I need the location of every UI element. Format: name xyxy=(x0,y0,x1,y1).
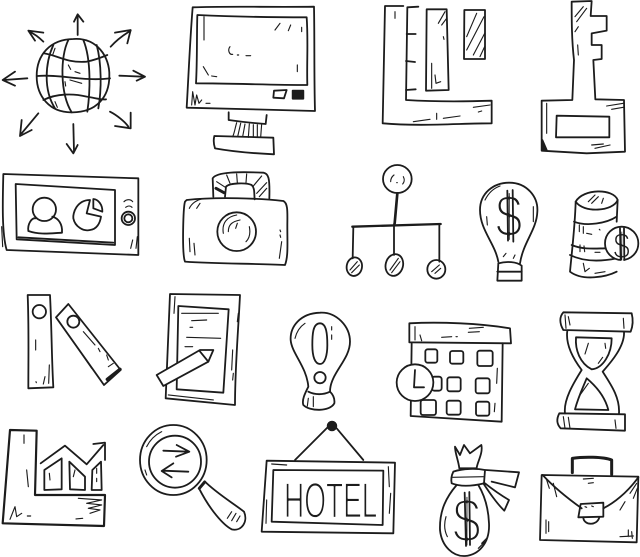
icon: magnifying glass xyxy=(140,425,245,530)
icon: dollar light bulb: $ xyxy=(496,183,522,250)
icon: money bag xyxy=(440,445,519,557)
icon: phone with profile and pie chart xyxy=(2,174,138,255)
icon: coin stack with dollar coin xyxy=(570,191,638,277)
icon: camera xyxy=(183,172,287,265)
icon: calendar with clock xyxy=(397,323,511,422)
icon: briefcase xyxy=(540,457,638,542)
icon: key xyxy=(542,1,625,153)
icon: hotel sign: HOTEL xyxy=(284,472,377,528)
icon: factory chart xyxy=(3,430,105,526)
icon: binders xyxy=(28,295,121,388)
icon: coin stack with dollar coin: $ xyxy=(613,225,630,267)
icon: money bag: $ xyxy=(453,486,481,557)
icon: computer monitor xyxy=(187,7,315,154)
icon: dollar light bulb xyxy=(480,183,537,281)
icon: globe with arrows xyxy=(3,14,145,153)
icon: hotel sign xyxy=(262,422,395,533)
icon: organisation chart xyxy=(345,165,445,279)
icon: ruler with bars xyxy=(383,6,492,125)
icon: document with pencil xyxy=(157,294,240,405)
icon: exclamation light bulb xyxy=(291,313,350,410)
icon: hourglass xyxy=(557,312,633,431)
